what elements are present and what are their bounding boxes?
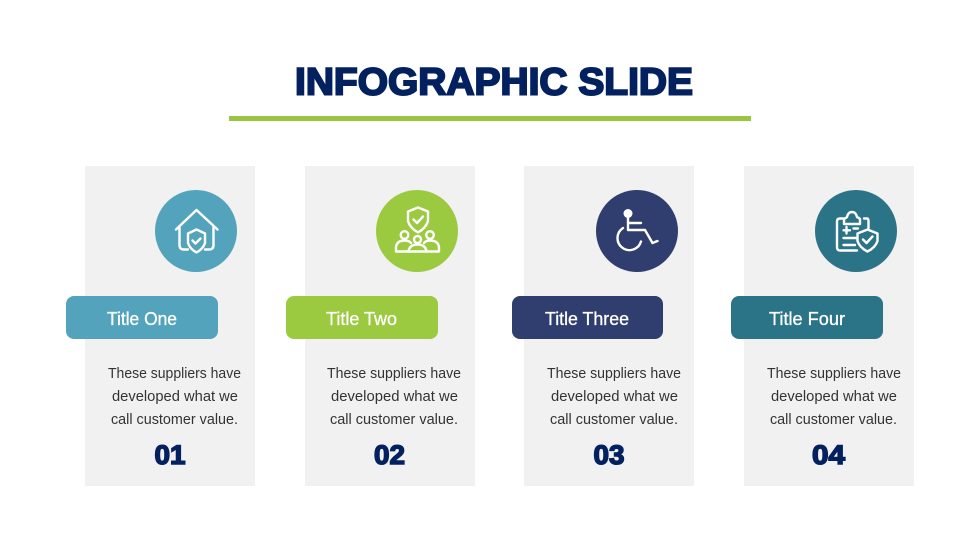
title: INFOGRAPHIC SLIDE (295, 62, 693, 104)
label pill: Title Three: Title Three (545, 309, 629, 329)
card background (305, 166, 475, 486)
body text: call customer value. (770, 411, 897, 428)
icon: house with shield (155, 190, 237, 272)
body text: These suppliers have (547, 365, 681, 382)
title underline (229, 116, 751, 121)
card background (85, 166, 255, 486)
label pill: Title One (66, 296, 218, 339)
body text: These suppliers have (108, 365, 241, 382)
label pill: Title Two: Title Two (326, 309, 397, 329)
number 03: 03 (594, 440, 624, 470)
body text: call customer value. (330, 411, 458, 428)
label pill: Title Three (512, 296, 663, 339)
label pill: Title Four (731, 296, 883, 339)
panel: card four (731, 166, 914, 486)
body text: These suppliers have (327, 365, 461, 382)
body text (547, 365, 681, 428)
panel: card one (66, 166, 255, 486)
body text: call customer value. (550, 411, 678, 428)
body text: developed what we (771, 388, 897, 405)
body text: developed what we (551, 388, 678, 405)
number 04: 04 (812, 440, 845, 470)
body text: developed what we (112, 388, 238, 405)
icon: people with shield (376, 190, 458, 272)
number 01: 01 (154, 440, 186, 470)
label pill: Title One: Title One (107, 309, 177, 329)
icon: wheelchair (596, 190, 678, 272)
label pill: Title Four: Title Four (769, 309, 845, 329)
body text (767, 365, 901, 428)
panel: card two (286, 166, 475, 486)
body text: call customer value. (111, 411, 238, 428)
panel: card three (512, 166, 694, 486)
body text: developed what we (331, 388, 458, 405)
body text: These suppliers have (767, 365, 901, 382)
number 02: 02 (374, 440, 405, 470)
body text (327, 365, 461, 428)
label pill: Title Two (286, 296, 438, 339)
card background (744, 166, 914, 486)
card background (524, 166, 694, 486)
icon: clipboard with shield (815, 190, 897, 272)
body text (108, 365, 241, 428)
